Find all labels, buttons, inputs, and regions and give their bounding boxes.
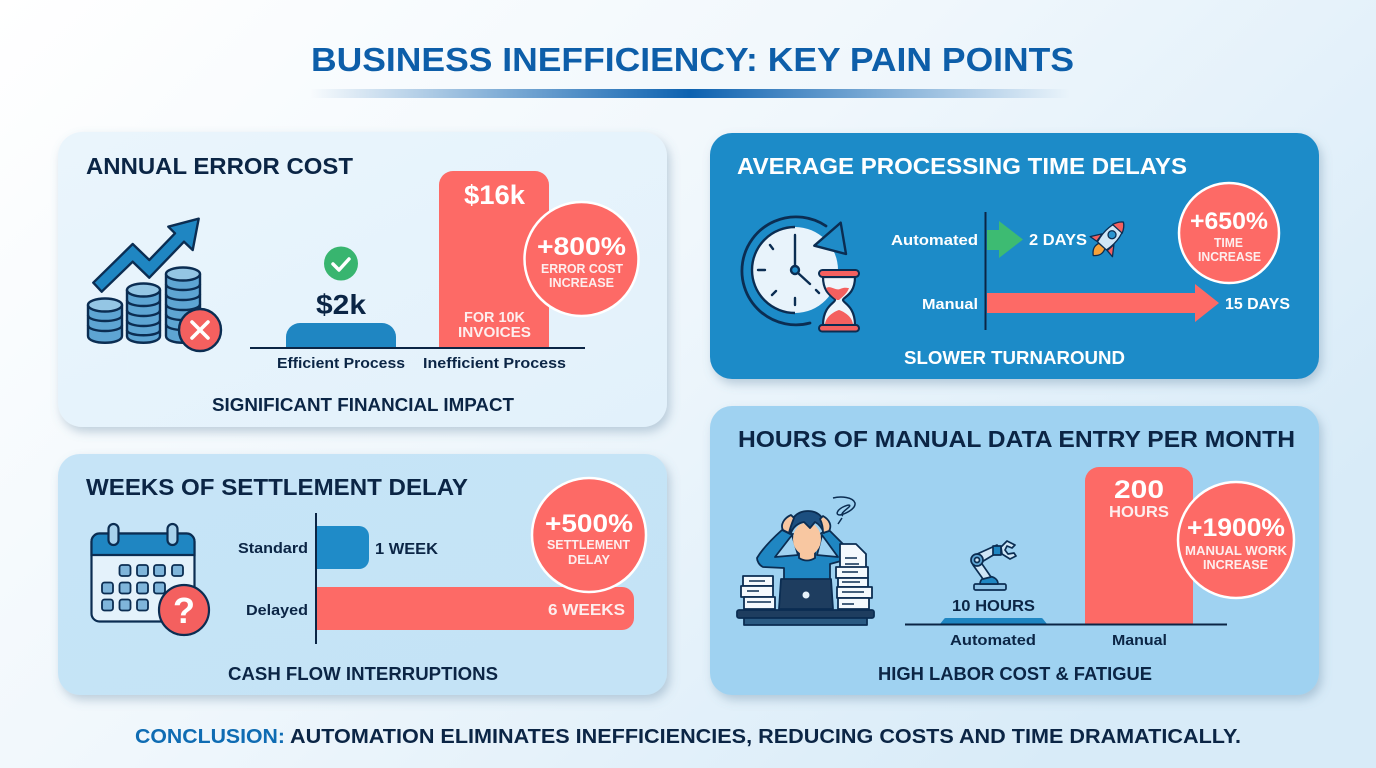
caption: significant financial impact: SIGNIFICANT FINANCIAL IMPACT	[212, 395, 514, 415]
icon: stressed worker at desk	[737, 497, 874, 625]
bar chart: settlement delay: Delayed	[246, 602, 308, 619]
heading: annual error cost: ANNUAL ERROR COST	[86, 153, 353, 179]
bar chart: manual data entry hours: 200	[1114, 476, 1164, 504]
callout: +500%	[532, 478, 646, 592]
callout: +800%: ERROR COST	[541, 261, 623, 276]
callout: +500%: SETTLEMENT	[547, 537, 630, 552]
icon: green check	[324, 246, 358, 280]
bar chart: error cost comparison: Efficient Process	[277, 355, 405, 372]
caption: cash flow interruptions: CASH FLOW INTERRUPTIONS	[228, 664, 498, 684]
chart: processing time arrows: Automated	[891, 232, 978, 249]
bar chart: settlement delay: 6 WEEKS	[548, 602, 625, 619]
title	[310, 42, 1074, 98]
bar chart: manual data entry hours: HOURS	[1109, 504, 1169, 521]
bar chart: error cost comparison: Inefficient Process	[423, 355, 566, 372]
panel: weeks of settlement delay	[58, 454, 667, 695]
panel: annual error cost	[58, 132, 667, 427]
callout: +650%: +650%	[1190, 208, 1268, 235]
bar chart: manual data entry hours: 10 HOURS	[952, 598, 1035, 615]
conclusion: CONCLUSION:	[135, 725, 285, 748]
panel: average processing time delays	[710, 133, 1319, 379]
callout: +1900%: INCREASE	[1203, 557, 1268, 572]
bar chart: manual data entry hours: Manual	[1112, 632, 1167, 649]
bar chart: settlement delay: 1 WEEK	[375, 541, 438, 558]
callout: +500%: DELAY	[568, 552, 610, 567]
bar chart: error cost comparison	[250, 171, 585, 372]
callout: +800%: INCREASE	[549, 275, 614, 290]
heading: hours of manual data entry: HOURS OF MANUAL DATA ENTRY PER MONTH	[738, 426, 1295, 452]
chart: processing time arrows: 2 DAYS	[1029, 232, 1087, 249]
caption: slower turnaround: SLOWER TURNAROUND	[904, 348, 1125, 368]
callout: +650%: TIME	[1214, 235, 1243, 250]
callout: +500%: +500%	[545, 510, 633, 538]
icon: clock and hourglass	[742, 217, 859, 332]
callout: +650%	[1179, 183, 1279, 283]
heading: weeks of settlement delay: WEEKS OF SETTLEMENT DELAY	[86, 474, 468, 500]
heading: average processing time delays: AVERAGE PROCESSING TIME DELAYS	[737, 153, 1187, 179]
chart: processing time arrows: Manual	[922, 296, 978, 313]
chart: processing time arrows	[891, 212, 1290, 330]
callout: +1900%: MANUAL WORK	[1185, 543, 1288, 558]
icon: robotic arm	[971, 541, 1016, 590]
panel: weeks of settlement delay: ?	[173, 590, 195, 631]
callout: +650%: INCREASE	[1198, 249, 1261, 264]
conclusion: AUTOMATION ELIMINATES INEFFICIENCIES, REDUCING COSTS AND TIME DRAMATICALLY.	[290, 725, 1241, 748]
bar chart: manual data entry hours: Automated	[950, 632, 1036, 649]
icon: rising arrow over coin stacks	[88, 219, 221, 351]
icon: calendar with question mark	[92, 524, 209, 635]
chart: processing time arrows: 15 DAYS	[1225, 296, 1290, 313]
bar chart: settlement delay	[238, 513, 634, 644]
bar chart: error cost comparison: FOR 10K	[464, 310, 526, 326]
bar chart: settlement delay: Standard	[238, 540, 308, 557]
icon: rocket	[1082, 212, 1135, 266]
callout: +800%	[524, 202, 638, 316]
bar chart: error cost comparison: INVOICES	[458, 325, 531, 341]
callout: +1900%: +1900%	[1187, 514, 1285, 542]
bar chart: error cost comparison: $2k	[316, 289, 366, 320]
bar chart: manual data entry hours	[905, 467, 1227, 649]
callout: +800%: +800%	[537, 233, 626, 261]
caption: high labor cost and fatigue: HIGH LABOR COST & FATIGUE	[878, 664, 1152, 684]
panel: hours of manual data entry	[710, 406, 1319, 695]
bar chart: error cost comparison: $16k	[464, 180, 526, 210]
callout: +1900%	[1178, 482, 1294, 598]
title: BUSINESS INEFFICIENCY: KEY PAIN POINTS	[311, 42, 1074, 79]
